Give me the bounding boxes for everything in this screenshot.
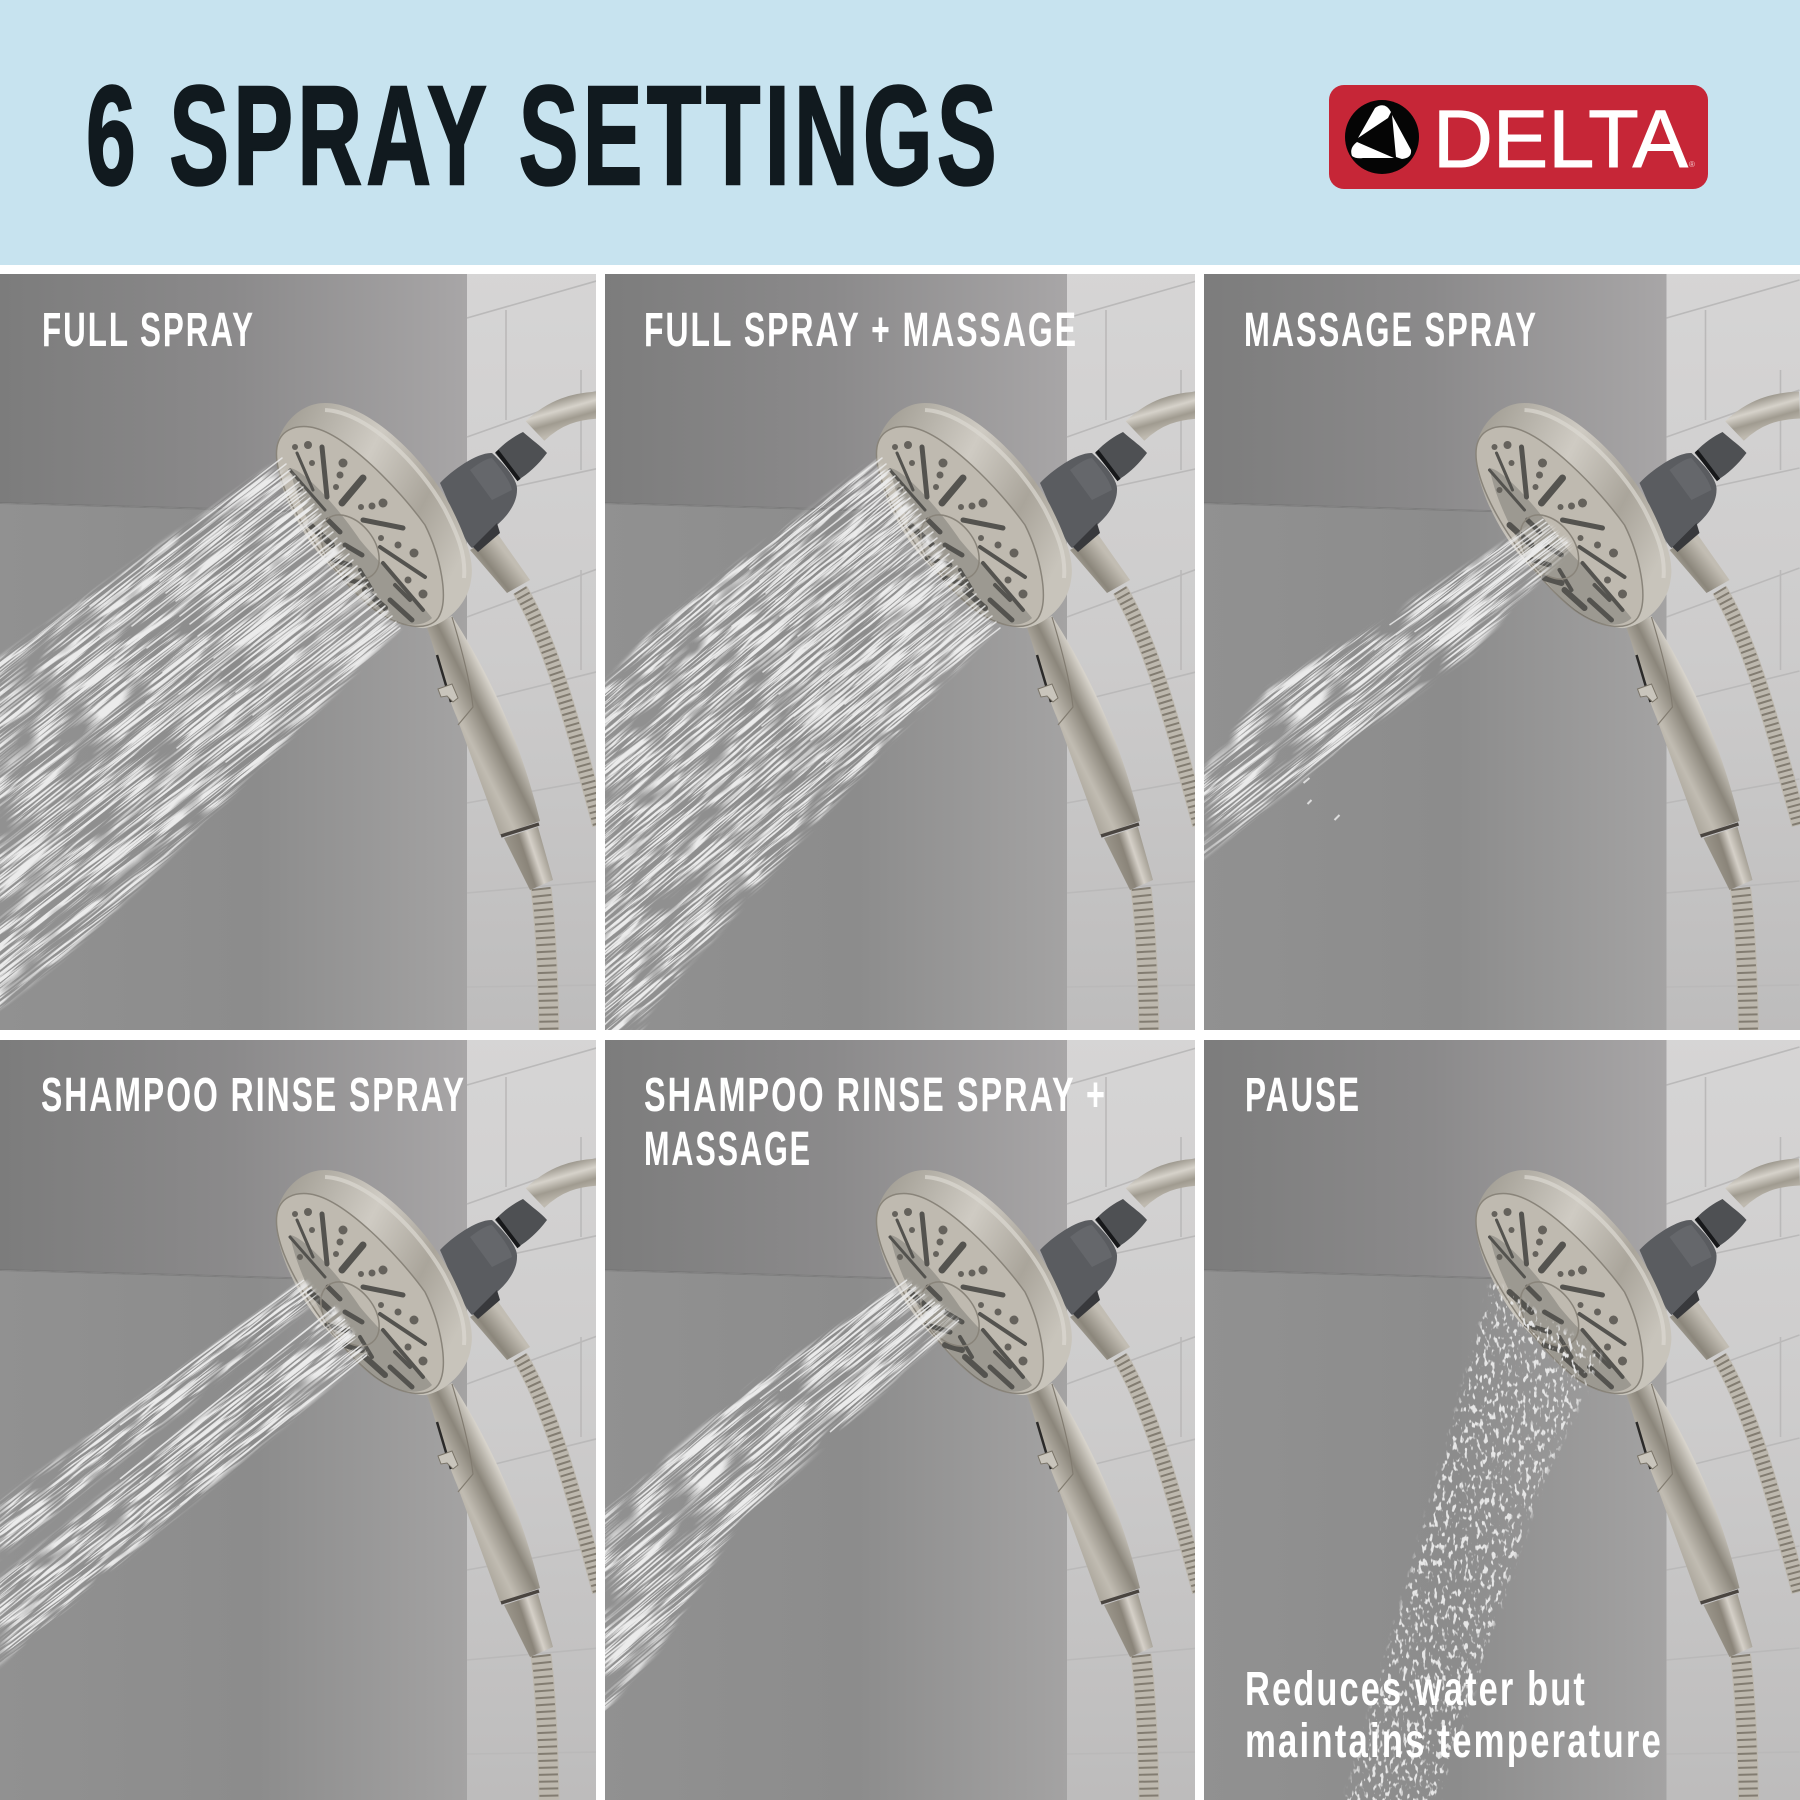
shower photo scene [0,265,600,1033]
label [644,1069,1107,1176]
label: FULL SPRAY + MASSAGE [644,304,1078,357]
label: MASSAGE [644,1123,812,1176]
shower photo scene [0,1032,600,1800]
logo: Delta: ® [1689,160,1695,169]
panel: pause [1200,1032,1800,1800]
note [1245,1663,1663,1768]
label: SHAMPOO RINSE SPRAY + [644,1069,1107,1122]
label: SHAMPOO RINSE SPRAY [41,1069,466,1122]
header band [0,0,1800,265]
label: PAUSE [1245,1069,1361,1122]
water spray [605,457,1001,1030]
panel: massage spray [1204,274,1800,1030]
label: MASSAGE SPRAY [1244,304,1538,357]
title: 6 SPRAY SETTINGS [86,56,1001,214]
logo: Delta: DELTA [1433,94,1688,185]
water spray [469,1228,1035,1747]
water spray [0,457,401,1010]
note: Reduces water but [1245,1663,1587,1716]
panel: shampoo rinse spray + massage [469,1032,1200,1800]
panel: full spray + massage [605,274,1195,1030]
water spray [1204,518,1572,860]
shower photo scene [1200,1032,1800,1800]
water spray [0,1279,369,1666]
shower photo scene [600,1032,1200,1800]
shower photo scene [1200,265,1800,1033]
panel: full spray [0,274,596,1030]
label: FULL SPRAY [42,304,255,357]
water droplets [1330,1267,1620,1800]
panel: shampoo rinse spray [0,1032,600,1800]
logo: Delta [1329,85,1708,189]
shower photo scene [600,265,1200,1033]
